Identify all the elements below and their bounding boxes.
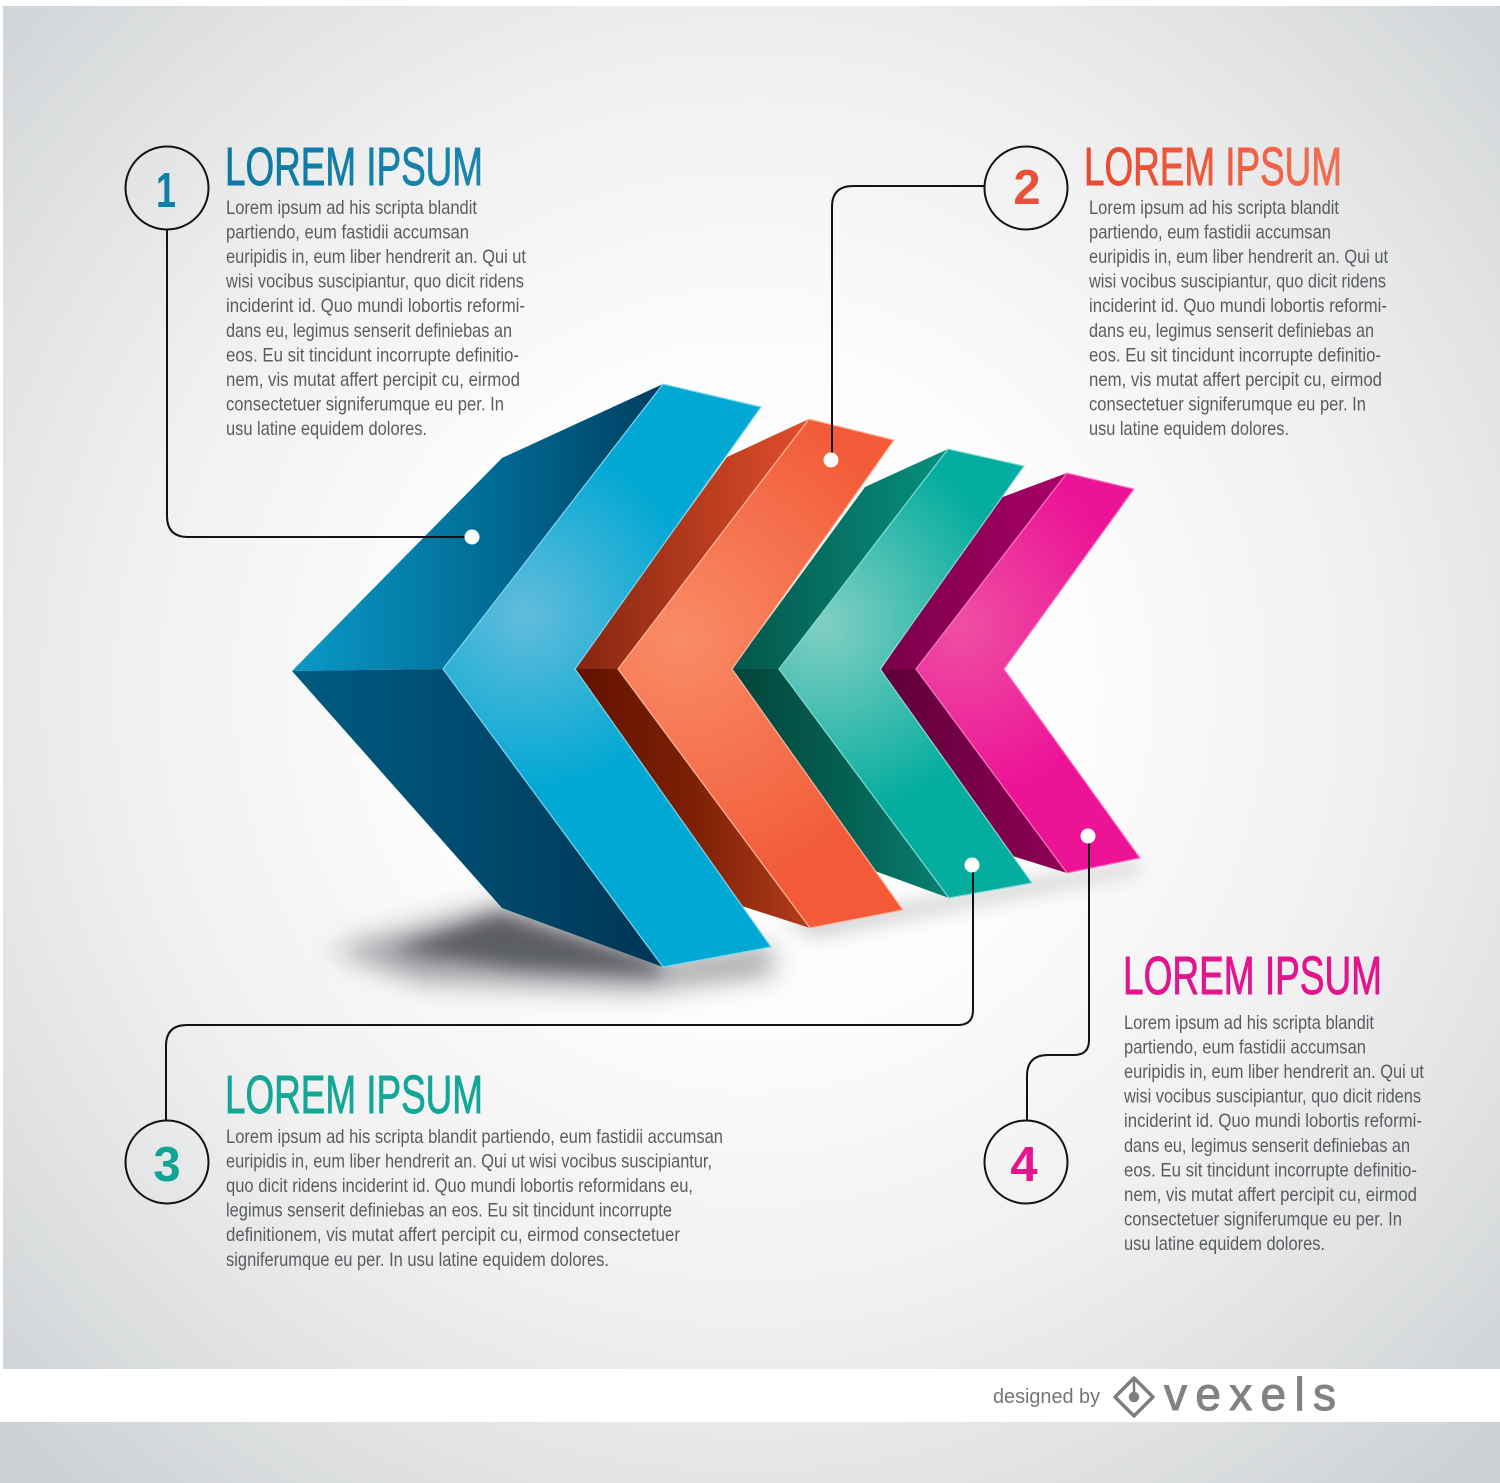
text block 1: nem, vis mutat affert percipit cu, eirmod [226, 369, 520, 391]
text block 4: consectetuer signiferumque eu per. In [1124, 1208, 1402, 1230]
footer logo: designed by vexels: designed by [993, 1386, 1100, 1408]
text block 2: Lorem ipsum ad his scripta blandit [1089, 197, 1339, 219]
text block 2: euripidis in, eum liber hendrerit an. Qui ut [1089, 246, 1388, 268]
text block 4: wisi vocibus suscipiantur, quo dicit ridens [1123, 1086, 1421, 1108]
connector 1 [167, 230, 480, 544]
text block 3: quo dicit ridens inciderint id. Quo mundi lobortis reformidans eu, [226, 1175, 693, 1197]
number badge 1: 1 [156, 164, 176, 218]
orange chevron lower side [574, 669, 810, 928]
pink chevron upper side [881, 473, 1067, 669]
teal chevron front face [779, 449, 1032, 898]
text block 1: partiendo, eum fastidii accumsan [226, 222, 469, 244]
heading 4: LOREM IPSUM [1123, 947, 1382, 1006]
text block 1: consectetuer signiferumque eu per. In [226, 394, 504, 416]
text block 3: legimus senserit definiebas an eos. Eu sit tincidunt incorrupte [226, 1200, 672, 1222]
text block 3: euripidis in, eum liber hendrerit an. Qui ut wisi vocibus suscipiantur, [226, 1150, 712, 1172]
text block 3: definitionem, vis mutat affert percipit cu, eirmod consectetuer [226, 1224, 680, 1246]
chevron 4: pink [881, 473, 1140, 873]
number badge 1 [126, 146, 208, 230]
text block 1: Lorem ipsum ad his scripta blandit [226, 197, 477, 219]
text block 2 [1088, 197, 1388, 440]
text block 2: inciderint id. Quo mundi lobortis reformi- [1089, 295, 1387, 317]
text block 4: nem, vis mutat affert percipit cu, eirmod [1124, 1184, 1417, 1206]
connector 3 [166, 858, 980, 1121]
number badge 3 [126, 1120, 208, 1204]
blue chevron upper side [292, 384, 663, 671]
chevron 1: blue [292, 384, 771, 967]
blue chevron front face [443, 384, 771, 967]
text block 4: inciderint id. Quo mundi lobortis reformi- [1124, 1110, 1422, 1132]
teal chevron lower side [732, 669, 949, 898]
text block 1: dans eu, legimus senserit definiebas an [226, 320, 512, 342]
text block 3 [226, 1126, 723, 1271]
text block 1: euripidis in, eum liber hendrerit an. Qui ut [226, 246, 526, 268]
footer logo: designed by vexels [993, 1368, 1336, 1420]
text block 1: usu latine equidem dolores. [226, 418, 427, 440]
text block 2: eos. Eu sit tincidunt incorrupte definitio- [1089, 344, 1381, 366]
text block 4: Lorem ipsum ad his scripta blandit [1124, 1012, 1374, 1034]
text block 1: eos. Eu sit tincidunt incorrupte definitio- [226, 344, 519, 366]
orange chevron upper side [574, 419, 809, 669]
text block 1 [225, 197, 526, 440]
text block 4: eos. Eu sit tincidunt incorrupte definitio- [1124, 1160, 1417, 1182]
text block 2: consectetuer signiferumque eu per. In [1089, 394, 1366, 416]
text block 1: wisi vocibus suscipiantur, quo dicit ridens [225, 270, 524, 292]
icon: vexels diamond [1115, 1378, 1153, 1416]
pink chevron lower side [881, 669, 1067, 873]
number badge 3: 3 [153, 1138, 181, 1192]
text block 3: Lorem ipsum ad his scripta blandit partiendo, eum fastidii accumsan [226, 1126, 723, 1148]
text block 2: wisi vocibus suscipiantur, quo dicit ridens [1088, 270, 1386, 292]
teal chevron upper side [732, 449, 948, 669]
number badge 4 [984, 1120, 1068, 1204]
connector 2 [824, 186, 985, 468]
heading 1: LOREM IPSUM [225, 138, 483, 197]
text block 2: dans eu, legimus senserit definiebas an [1089, 320, 1374, 342]
number badge 4: 4 [1010, 1138, 1038, 1192]
ground shadow [330, 862, 1140, 992]
text block 3: signiferumque eu per. In usu latine equidem dolores. [226, 1249, 609, 1271]
heading 2: LOREM IPSUM [1084, 138, 1342, 197]
chevron 3: teal [732, 449, 1032, 898]
pink chevron front face [916, 473, 1140, 873]
number badge 2 [984, 146, 1068, 230]
text block 4: usu latine equidem dolores. [1124, 1233, 1325, 1255]
text block 4: euripidis in, eum liber hendrerit an. Qui ut [1124, 1061, 1424, 1083]
chevron 2: orange [574, 419, 903, 928]
text block 1: inciderint id. Quo mundi lobortis reformi- [226, 295, 525, 317]
text block 2: partiendo, eum fastidii accumsan [1089, 222, 1331, 244]
heading 3: LOREM IPSUM [225, 1066, 483, 1125]
text block 4 [1123, 1012, 1424, 1255]
text block 4: dans eu, legimus senserit definiebas an [1124, 1135, 1410, 1157]
connector 4 [1027, 828, 1096, 1121]
text block 2: usu latine equidem dolores. [1089, 418, 1289, 440]
footer logo: designed by vexels: vexels [1164, 1368, 1336, 1420]
text block 2: nem, vis mutat affert percipit cu, eirmod [1089, 369, 1382, 391]
orange chevron front face [618, 419, 903, 928]
blue chevron lower side [292, 669, 663, 967]
text block 4: partiendo, eum fastidii accumsan [1124, 1036, 1366, 1058]
number badge 2: 2 [1013, 161, 1041, 215]
